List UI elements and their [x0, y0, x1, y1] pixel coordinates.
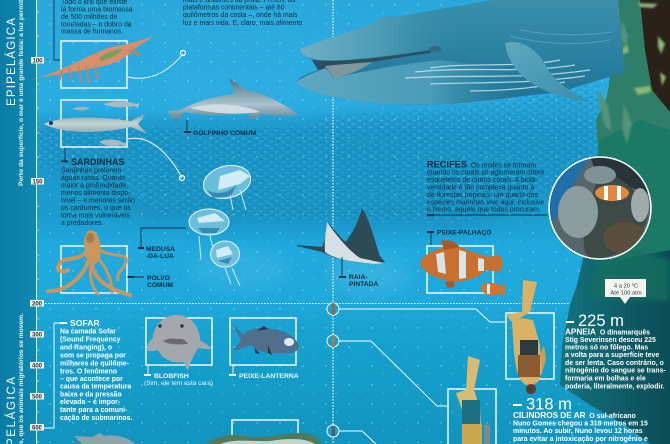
plataforma text: plataformas continentais – até 80: [183, 4, 285, 12]
sofar text: and Ranging), o: [60, 344, 112, 352]
raia label: PINTADA: [349, 281, 378, 288]
recifes text: de florestas tropicais: um quarto das: [427, 192, 539, 199]
recifes text: versidade é tão complexa quanto à: [427, 184, 534, 192]
peixe-palhaço label: PEIXE-PALHAÇO: [437, 230, 492, 236]
apneia text: APNEIA: [565, 328, 596, 336]
peixe-palhaço label: [427, 230, 492, 246]
polvo label: [127, 275, 173, 289]
apneia text: O dinamarquês: [598, 330, 650, 336]
depth ruler: [30, 0, 44, 444]
cilindros text: Nuno Gomes chegou a 318 metros em 15: [513, 420, 648, 428]
octopus: [48, 230, 130, 295]
cilindros text: O sul-africano: [587, 413, 636, 420]
apneia text: formaria em bolhas e ele: [565, 376, 646, 382]
sardines text: nível – e menores serão: [61, 198, 135, 204]
sofar text: som se propaga por: [60, 352, 126, 360]
apneia text: a volta para a superfície teve: [565, 352, 659, 359]
apneia text: de ser lenta. Caso contrário, o: [565, 360, 664, 367]
sofar text: [41, 318, 132, 428]
recifes text: espécies marinhas vive aqui. Inclusive: [427, 200, 544, 206]
sardines box and illustration: [44, 100, 147, 147]
dolphin label: GOLFINHO COMUM: [193, 130, 257, 137]
sardines text: os cardumes, o que os: [61, 205, 131, 212]
sofar text: – que acontece por: [60, 376, 123, 383]
cilindros text: CILINDROS DE AR: [513, 411, 586, 420]
moon jellyfish: [189, 161, 254, 286]
recifes text: Os recifes se formam: [469, 162, 536, 170]
lanternfish: [230, 318, 299, 365]
lanternfish label: PEIXE-LANTERNA: [239, 373, 299, 380]
sofar text: elevada – é impor-: [60, 399, 121, 406]
depth ruler: 300: [32, 332, 43, 338]
lanternfish label: [229, 365, 299, 380]
sofar text: tros. O fenômeno: [60, 368, 117, 376]
spotted eagle ray: [297, 208, 385, 278]
plataforma text: luz e mais vida. E, claro, mais alimento.: [183, 20, 304, 27]
dive marker 318: [327, 335, 448, 406]
sofar text: baixa e da pressão: [60, 392, 122, 398]
heading: epipelágica: EPIPELÁGICA: [5, 18, 18, 106]
depth ruler: 200: [32, 302, 43, 308]
temperature tag: Até 100 atm: [610, 290, 642, 296]
depth ruler: 400: [32, 364, 43, 370]
heading: mesopelágica: PELÁGICA: [5, 377, 18, 444]
clownfish: [420, 240, 505, 296]
krill connector: [54, 0, 60, 60]
temperature tag: 4 a 20 °C: [614, 284, 638, 290]
sofar text: milhares de quilôme-: [60, 360, 130, 368]
medusa label: MEDUSA: [146, 246, 175, 253]
sofar text: SOFAR: [70, 318, 100, 328]
medusa label: -DA-LUA: [146, 253, 174, 260]
apneia text: poderia, literalmente, explodir.: [565, 384, 665, 390]
subtitle: epipelágica: Perto da superfície, o mar é uma grande festa: a luz permite: [18, 0, 25, 186]
recifes text: o Nemo, aquele que todos procuram.: [427, 206, 541, 214]
sardines text: torna mais vulneráveis: [61, 212, 130, 220]
scuba diver: [448, 356, 496, 444]
reef photo circle: [548, 156, 652, 260]
medusa label: [138, 228, 186, 260]
recifes text: RECIFES: [427, 160, 467, 170]
recifes text: quando os corais se aglomeram sobre: [427, 170, 544, 176]
sofar text: causa da temperatura: [60, 384, 131, 390]
krill text: toneladas – o dobro da: [61, 22, 132, 28]
polvo label: COMUM: [147, 282, 173, 289]
sofar text: (Sound Frequency: [60, 336, 121, 344]
apneia text: Stig Severinsen desceu 225: [565, 337, 656, 344]
krill callout curve: [128, 50, 186, 78]
sofar text: cação de submarinos.: [60, 415, 132, 422]
cilindros text: minutos. Ao subir, Nuno levou 12 horas: [513, 428, 643, 435]
eel box and illustration: [206, 420, 322, 444]
apneia text: metros só no fôlego. Mas: [565, 344, 648, 352]
zone dividers: [36, 0, 570, 444]
dive marker deep: [327, 425, 376, 444]
freediver: [506, 280, 554, 394]
raia label: RAIA-: [349, 274, 368, 281]
sardines text: a predadores.: [61, 220, 104, 227]
cilindros text: para evitar a intoxicação por nitrogênio e: [513, 436, 648, 443]
depth ruler: 600: [32, 426, 43, 432]
sardines text: [61, 148, 135, 227]
blobfish label: [144, 365, 213, 387]
sofar text: Na camada Sofar: [60, 328, 116, 336]
plataforma text: quilômetros da costa –, onde há mais: [183, 12, 298, 19]
depth ruler: 500: [32, 394, 43, 400]
krill text: de 500 milhões de: [61, 14, 117, 21]
apneia text: nitrogênio do sangue se trans-: [565, 368, 666, 374]
deep fish: [74, 433, 135, 444]
left band: [0, 0, 36, 444]
blobfish: [146, 315, 212, 370]
sardines text: menos alimento dispo-: [61, 190, 130, 197]
krill text: lá forma uma biomassa: [61, 6, 133, 14]
sardines text: águas rasas. Quanto: [61, 175, 125, 182]
sardines text: Sardinhas preferem: [61, 168, 122, 174]
sardines callout curve: [128, 138, 184, 180]
recifes text: [427, 160, 548, 216]
blobfish label: BLOBFISH: [154, 373, 189, 380]
dolphin: [167, 78, 298, 133]
recifes text: esqueletos de outros corais. A biodi-: [427, 177, 538, 184]
krill text: massa de humanos.: [61, 28, 123, 36]
225 m heading: 225 m: [578, 312, 624, 330]
blue whale: [296, 0, 625, 105]
polvo label: POLVO: [147, 275, 170, 282]
depth ruler: 100: [32, 58, 43, 64]
sofar text: tante para a comuni-: [60, 407, 128, 414]
blobfish label: (Sim, ele tem esta cara): [144, 380, 213, 387]
depth ruler: 150: [32, 180, 43, 186]
318 m heading: 318 m: [526, 396, 572, 414]
krill box and illustration: [38, 36, 153, 88]
temperature tag: [605, 279, 646, 304]
dive marker 225: [327, 303, 506, 322]
sardines text: SARDINHAS: [71, 157, 125, 167]
rock and kelp wall: [560, 0, 670, 444]
subtitle: mesopelágica: s, que os animais migratórios se movem.: [18, 313, 25, 444]
sardines text: maior a profundidade,: [61, 182, 128, 190]
